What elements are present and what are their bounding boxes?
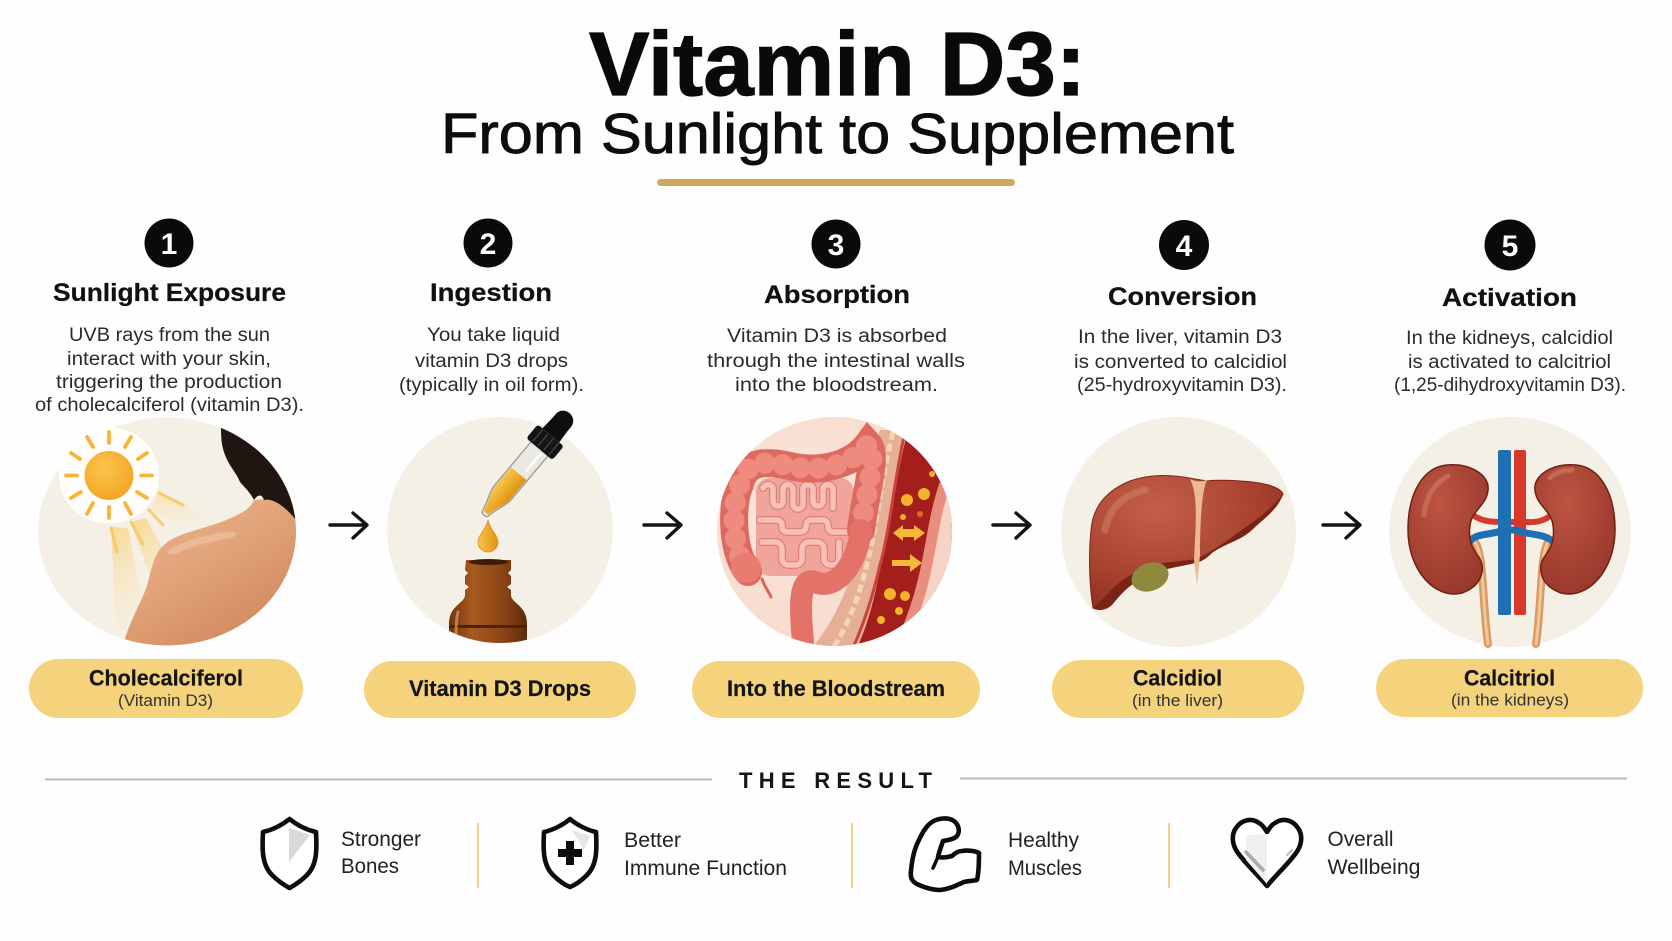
benefit: healthy muscles: Muscles xyxy=(1008,856,1082,880)
step number 1: 1 xyxy=(161,228,177,261)
pill: calcidiol: Calcidiol xyxy=(1133,666,1222,690)
description: absorption xyxy=(707,326,965,396)
title xyxy=(441,15,1234,186)
step number 4: 4 xyxy=(1176,230,1193,263)
heading: activation: Activation xyxy=(1442,284,1577,312)
description: absorption: Vitamin D3 is absorbed xyxy=(727,326,947,347)
panel: step 2 ingestion xyxy=(364,218,636,718)
benefit: healthy muscles: Healthy xyxy=(1008,828,1079,852)
step number 2 xyxy=(464,218,512,268)
benefit: stronger bones xyxy=(263,819,421,888)
benefit: healthy muscles xyxy=(911,818,1082,890)
pill: cholecalciferol: (Vitamin D3) xyxy=(118,691,213,710)
title underline xyxy=(657,179,1015,186)
subtitle: From Sunlight to Supplement xyxy=(441,102,1234,166)
blood vessel xyxy=(810,430,960,650)
description: activation xyxy=(1394,328,1626,396)
step number 2: 2 xyxy=(480,228,496,261)
heading: conversion: Conversion xyxy=(1108,283,1257,311)
description: sunlight exposure xyxy=(35,325,304,416)
icon: heart xyxy=(1233,820,1301,886)
benefit: better immune function: Immune Function xyxy=(624,856,787,880)
heading: sunlight exposure: Sunlight Exposure xyxy=(53,279,286,307)
section: the result xyxy=(45,768,1627,890)
description: conversion: In the liver, vitamin D3 xyxy=(1078,327,1282,348)
small intestine xyxy=(756,478,854,576)
description: conversion xyxy=(1074,327,1287,396)
arrow: step 3 to 4 xyxy=(993,513,1030,538)
benefit: overall wellbeing xyxy=(1233,820,1420,886)
icon: shield with plus xyxy=(544,819,596,887)
description: ingestion: (typically in oil form). xyxy=(399,375,584,396)
pill: calcitriol: Calcitriol xyxy=(1464,666,1555,690)
icon: flexed arm xyxy=(911,818,979,890)
benefit: stronger bones: Bones xyxy=(341,854,399,878)
description: sunlight exposure: interact with your skin, xyxy=(67,349,271,370)
illustration: liver xyxy=(1061,417,1296,647)
description: activation: (1,25-dihydroxyvitamin D3). xyxy=(1394,375,1626,396)
description: ingestion xyxy=(399,325,584,396)
description: activation: is activated to calcitriol xyxy=(1408,352,1611,373)
pill: calcidiol: (in the liver) xyxy=(1132,691,1223,710)
illustration: dropper and bottle xyxy=(387,402,613,650)
description: absorption: through the intestinal walls xyxy=(707,351,965,372)
description: ingestion: You take liquid xyxy=(427,325,560,346)
step number 5: 5 xyxy=(1502,230,1518,263)
panel: step 5 activation xyxy=(1376,220,1643,717)
description: activation: In the kidneys, calcidiol xyxy=(1406,328,1613,349)
panel: step 1 sunlight exposure xyxy=(29,218,310,718)
benefit: better immune function: Better xyxy=(624,828,681,852)
pill: calcitriol: (in the kidneys) xyxy=(1451,690,1569,710)
pill: vitamin d3 drops xyxy=(364,661,636,718)
arrow: step 4 to 5 xyxy=(1323,513,1360,538)
benefit: stronger bones: Stronger xyxy=(341,827,421,851)
arrow: step 2 to 3 xyxy=(644,513,681,538)
panel: step 3 absorption xyxy=(692,220,980,718)
heading: ingestion: Ingestion xyxy=(430,279,552,307)
step number 1 xyxy=(144,218,194,268)
illustration: sun and shoulder xyxy=(38,418,310,650)
arrow: step 1 to 2 xyxy=(330,513,367,538)
pill: cholecalciferol: Cholecalciferol xyxy=(89,666,243,690)
description: ingestion: vitamin D3 drops xyxy=(415,351,568,372)
illustration: kidneys xyxy=(1389,417,1631,647)
heading: absorption: Absorption xyxy=(764,281,910,309)
icon: shield xyxy=(263,819,316,888)
step number 4 xyxy=(1159,220,1209,270)
step number 3 xyxy=(812,220,860,268)
benefit: overall wellbeing: Wellbeing xyxy=(1328,855,1420,879)
pill: vitamin d3 drops: Vitamin D3 Drops xyxy=(409,676,591,701)
description: conversion: is converted to calcidiol xyxy=(1074,352,1287,373)
step number 5 xyxy=(1484,220,1536,270)
description: sunlight exposure: triggering the production xyxy=(56,372,282,393)
benefit: better immune function xyxy=(544,819,787,887)
step number 3: 3 xyxy=(828,229,844,262)
description: sunlight exposure: of cholecalciferol (vitamin D3). xyxy=(35,395,304,416)
benefit: overall wellbeing: Overall xyxy=(1328,827,1394,851)
pill: into the bloodstream xyxy=(692,661,980,718)
pill: into the bloodstream: Into the Bloodstream xyxy=(727,676,945,701)
pill: calcidiol xyxy=(1052,660,1304,718)
title: Vitamin D3: xyxy=(589,15,1086,115)
pill: calcitriol xyxy=(1376,659,1643,717)
illustration: intestine and blood vessel xyxy=(717,417,960,650)
description: sunlight exposure: UVB rays from the sun xyxy=(69,325,270,346)
heading: the result: THE RESULT xyxy=(739,768,933,793)
description: conversion: (25-hydroxyvitamin D3). xyxy=(1077,375,1287,396)
panel: step 4 conversion xyxy=(1052,220,1304,718)
pill: cholecalciferol xyxy=(29,659,303,718)
large intestine xyxy=(731,444,872,642)
description: absorption: into the bloodstream. xyxy=(735,375,938,396)
